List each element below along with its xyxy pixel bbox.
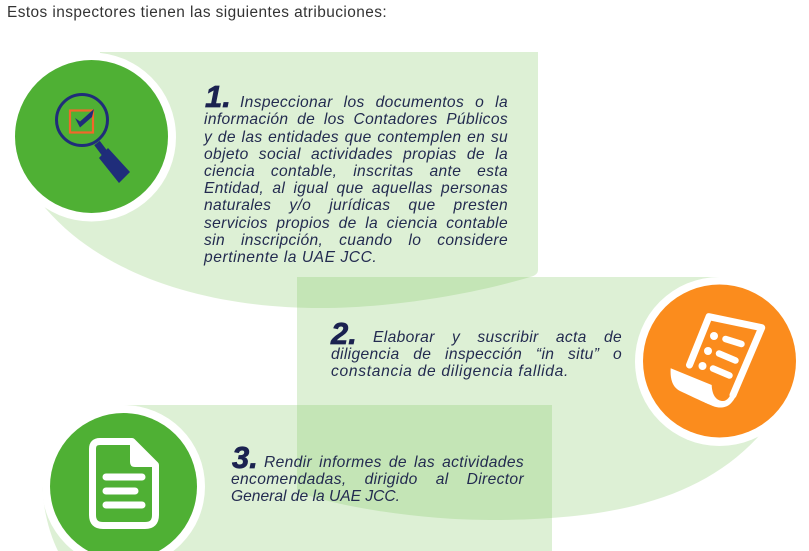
text line: objeto social actividades propias de la [204,146,508,163]
number 3: 3. [232,440,258,475]
text line: Entidad, al igual que aquellas personas [204,180,508,197]
number 1: 1. [205,79,231,114]
text line: Inspeccionar los documentos o la [240,94,508,111]
panel: item 3 background [42,405,552,551]
text line: sin inscripción, cuando lo considere [204,232,508,249]
icon: document scroll badge [635,277,804,446]
icon: document badge [42,405,205,551]
icon: magnifier badge [7,52,176,222]
heading: Estos inspectores tienen las siguientes atribuciones: [7,4,387,21]
text block: item 3 [231,440,524,505]
panel: item 1 background [8,52,538,308]
text line: General de la UAE JCC. [231,488,400,505]
text block: item 2 [330,316,622,380]
text line: naturales y/o jurídicas que presten [204,197,508,214]
text line: pertinente la UAE JCC. [204,249,377,266]
number 2: 2. [331,316,357,351]
text line: información de los Contadores Públicos [204,111,508,128]
text block: item 1 [203,79,508,266]
text line: diligencia de inspección “in situ” o [331,346,622,363]
text line: y de las entidades que contemplen en su [204,128,508,146]
text line: servicios propios de la ciencia contable [204,215,508,232]
text line: constancia de diligencia fallida. [331,363,569,380]
text line: encomendadas, dirigido al Director [231,471,524,488]
text line: ciencia contable, inscritas ante esta [204,163,508,180]
panel: item 2 background [297,277,799,520]
text line: Rendir informes de las actividades [264,454,524,471]
text line: Elaborar y suscribir acta de [373,329,622,346]
